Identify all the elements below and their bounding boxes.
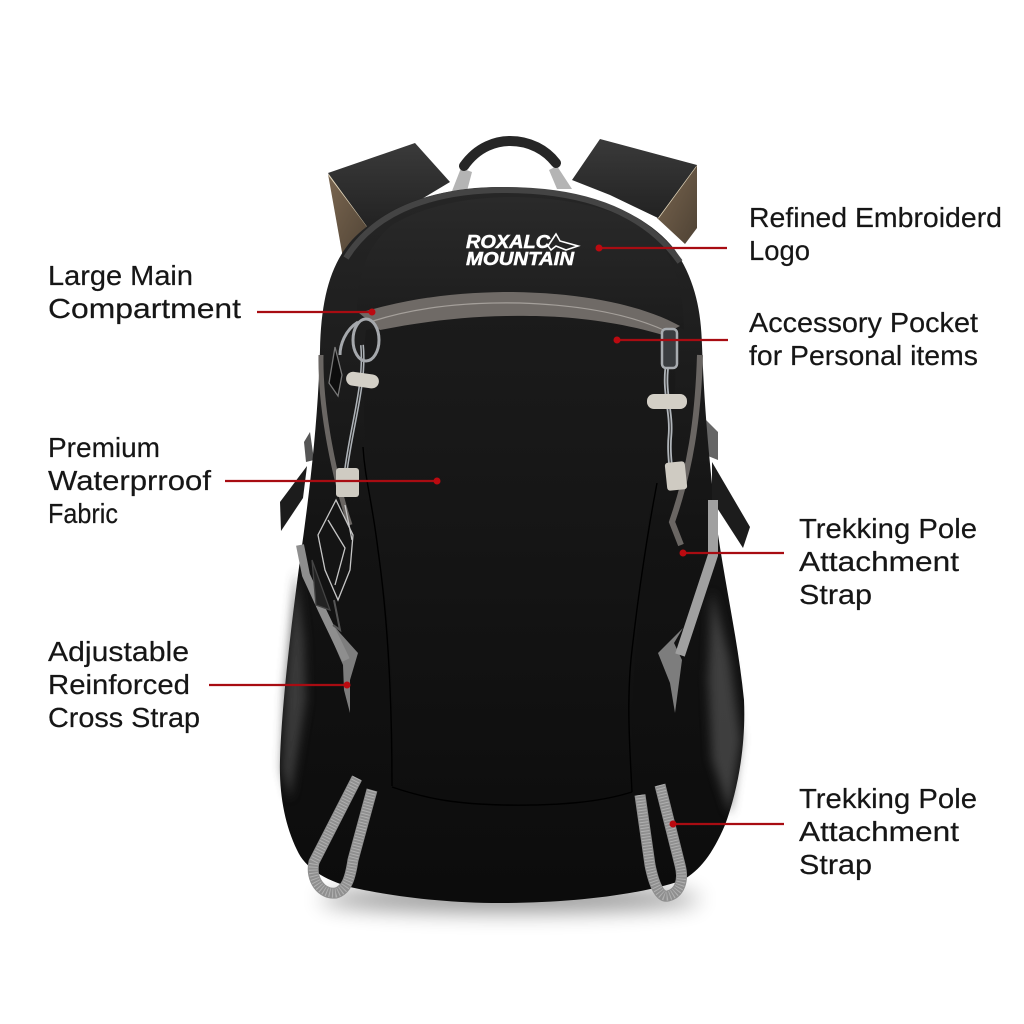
label: accessory pocket: Accessory Pocket	[749, 307, 978, 338]
label: refined embroidered logo	[596, 202, 1002, 266]
label: adjustable reinforced cross strap: Adjustable	[48, 636, 189, 667]
label: trekking pole attachment strap lower: Attachment	[799, 816, 959, 847]
label: adjustable reinforced cross strap: Cross Strap	[48, 702, 200, 733]
label: adjustable reinforced cross strap	[48, 636, 350, 733]
right side strap	[680, 500, 713, 655]
label: refined embroidered logo: Refined Embroiderd	[749, 202, 1002, 233]
logo: ROXALC	[466, 232, 551, 252]
label: premium waterproof fabric: Premium	[48, 432, 160, 463]
icon: right shoulder strap	[572, 139, 697, 244]
label: trekking pole attachment strap upper: Strap	[799, 579, 872, 610]
left grey seam binding	[321, 355, 350, 525]
backpack body	[280, 187, 744, 903]
accessory pocket zipper band	[359, 292, 680, 335]
left side grey patch	[318, 607, 358, 713]
label: large main compartment: Large Main	[48, 260, 193, 291]
icon: left shoulder strap	[328, 143, 450, 258]
icon: left side tab	[304, 432, 314, 462]
label: refined embroidered logo: Logo	[749, 235, 810, 266]
label: trekking pole attachment strap lower: Strap	[799, 849, 872, 880]
top lid panel	[357, 197, 684, 330]
icon: right side tab	[706, 420, 718, 460]
logo: MOUNTAIN	[466, 249, 575, 269]
label: large main compartment: Compartment	[48, 293, 241, 324]
logo	[466, 232, 578, 269]
left bottom loop strap	[313, 778, 372, 893]
label: accessory pocket: for Personal items	[749, 340, 978, 371]
label: premium waterproof fabric	[48, 432, 440, 529]
label: trekking pole attachment strap lower	[670, 783, 977, 880]
left side strap	[300, 545, 346, 660]
label: trekking pole attachment strap lower: Trekking Pole	[799, 783, 977, 814]
icon: left side wing strap	[280, 466, 307, 531]
label: large main compartment	[48, 260, 376, 324]
left carabiner and keychain	[312, 347, 353, 630]
side panel highlights	[282, 570, 741, 815]
lid binding	[346, 190, 680, 262]
icon: top carry handle	[452, 141, 572, 191]
front pocket panel	[363, 314, 675, 805]
label: trekking pole attachment strap upper: Attachment	[799, 546, 959, 577]
icon: right side wing strap	[712, 462, 750, 548]
label: trekking pole attachment strap upper	[680, 513, 977, 610]
label: premium waterproof fabric: Waterprroof	[48, 465, 211, 496]
right side grey patch	[658, 628, 683, 713]
right bottom loop strap	[640, 785, 682, 896]
icon: logo mark	[548, 234, 578, 250]
ground shadow	[320, 886, 700, 912]
label: premium waterproof fabric: Fabric	[48, 498, 118, 529]
backpack illustration	[280, 139, 750, 912]
label: adjustable reinforced cross strap: Reinforced	[48, 669, 190, 700]
left cord and toggles	[336, 319, 380, 497]
right grey seam binding	[672, 355, 700, 545]
label: trekking pole attachment strap upper: Trekking Pole	[799, 513, 977, 544]
side panel seams	[363, 447, 657, 805]
right cord and toggles	[647, 329, 687, 491]
label: accessory pocket	[614, 307, 978, 371]
zipper stitch	[373, 303, 668, 332]
